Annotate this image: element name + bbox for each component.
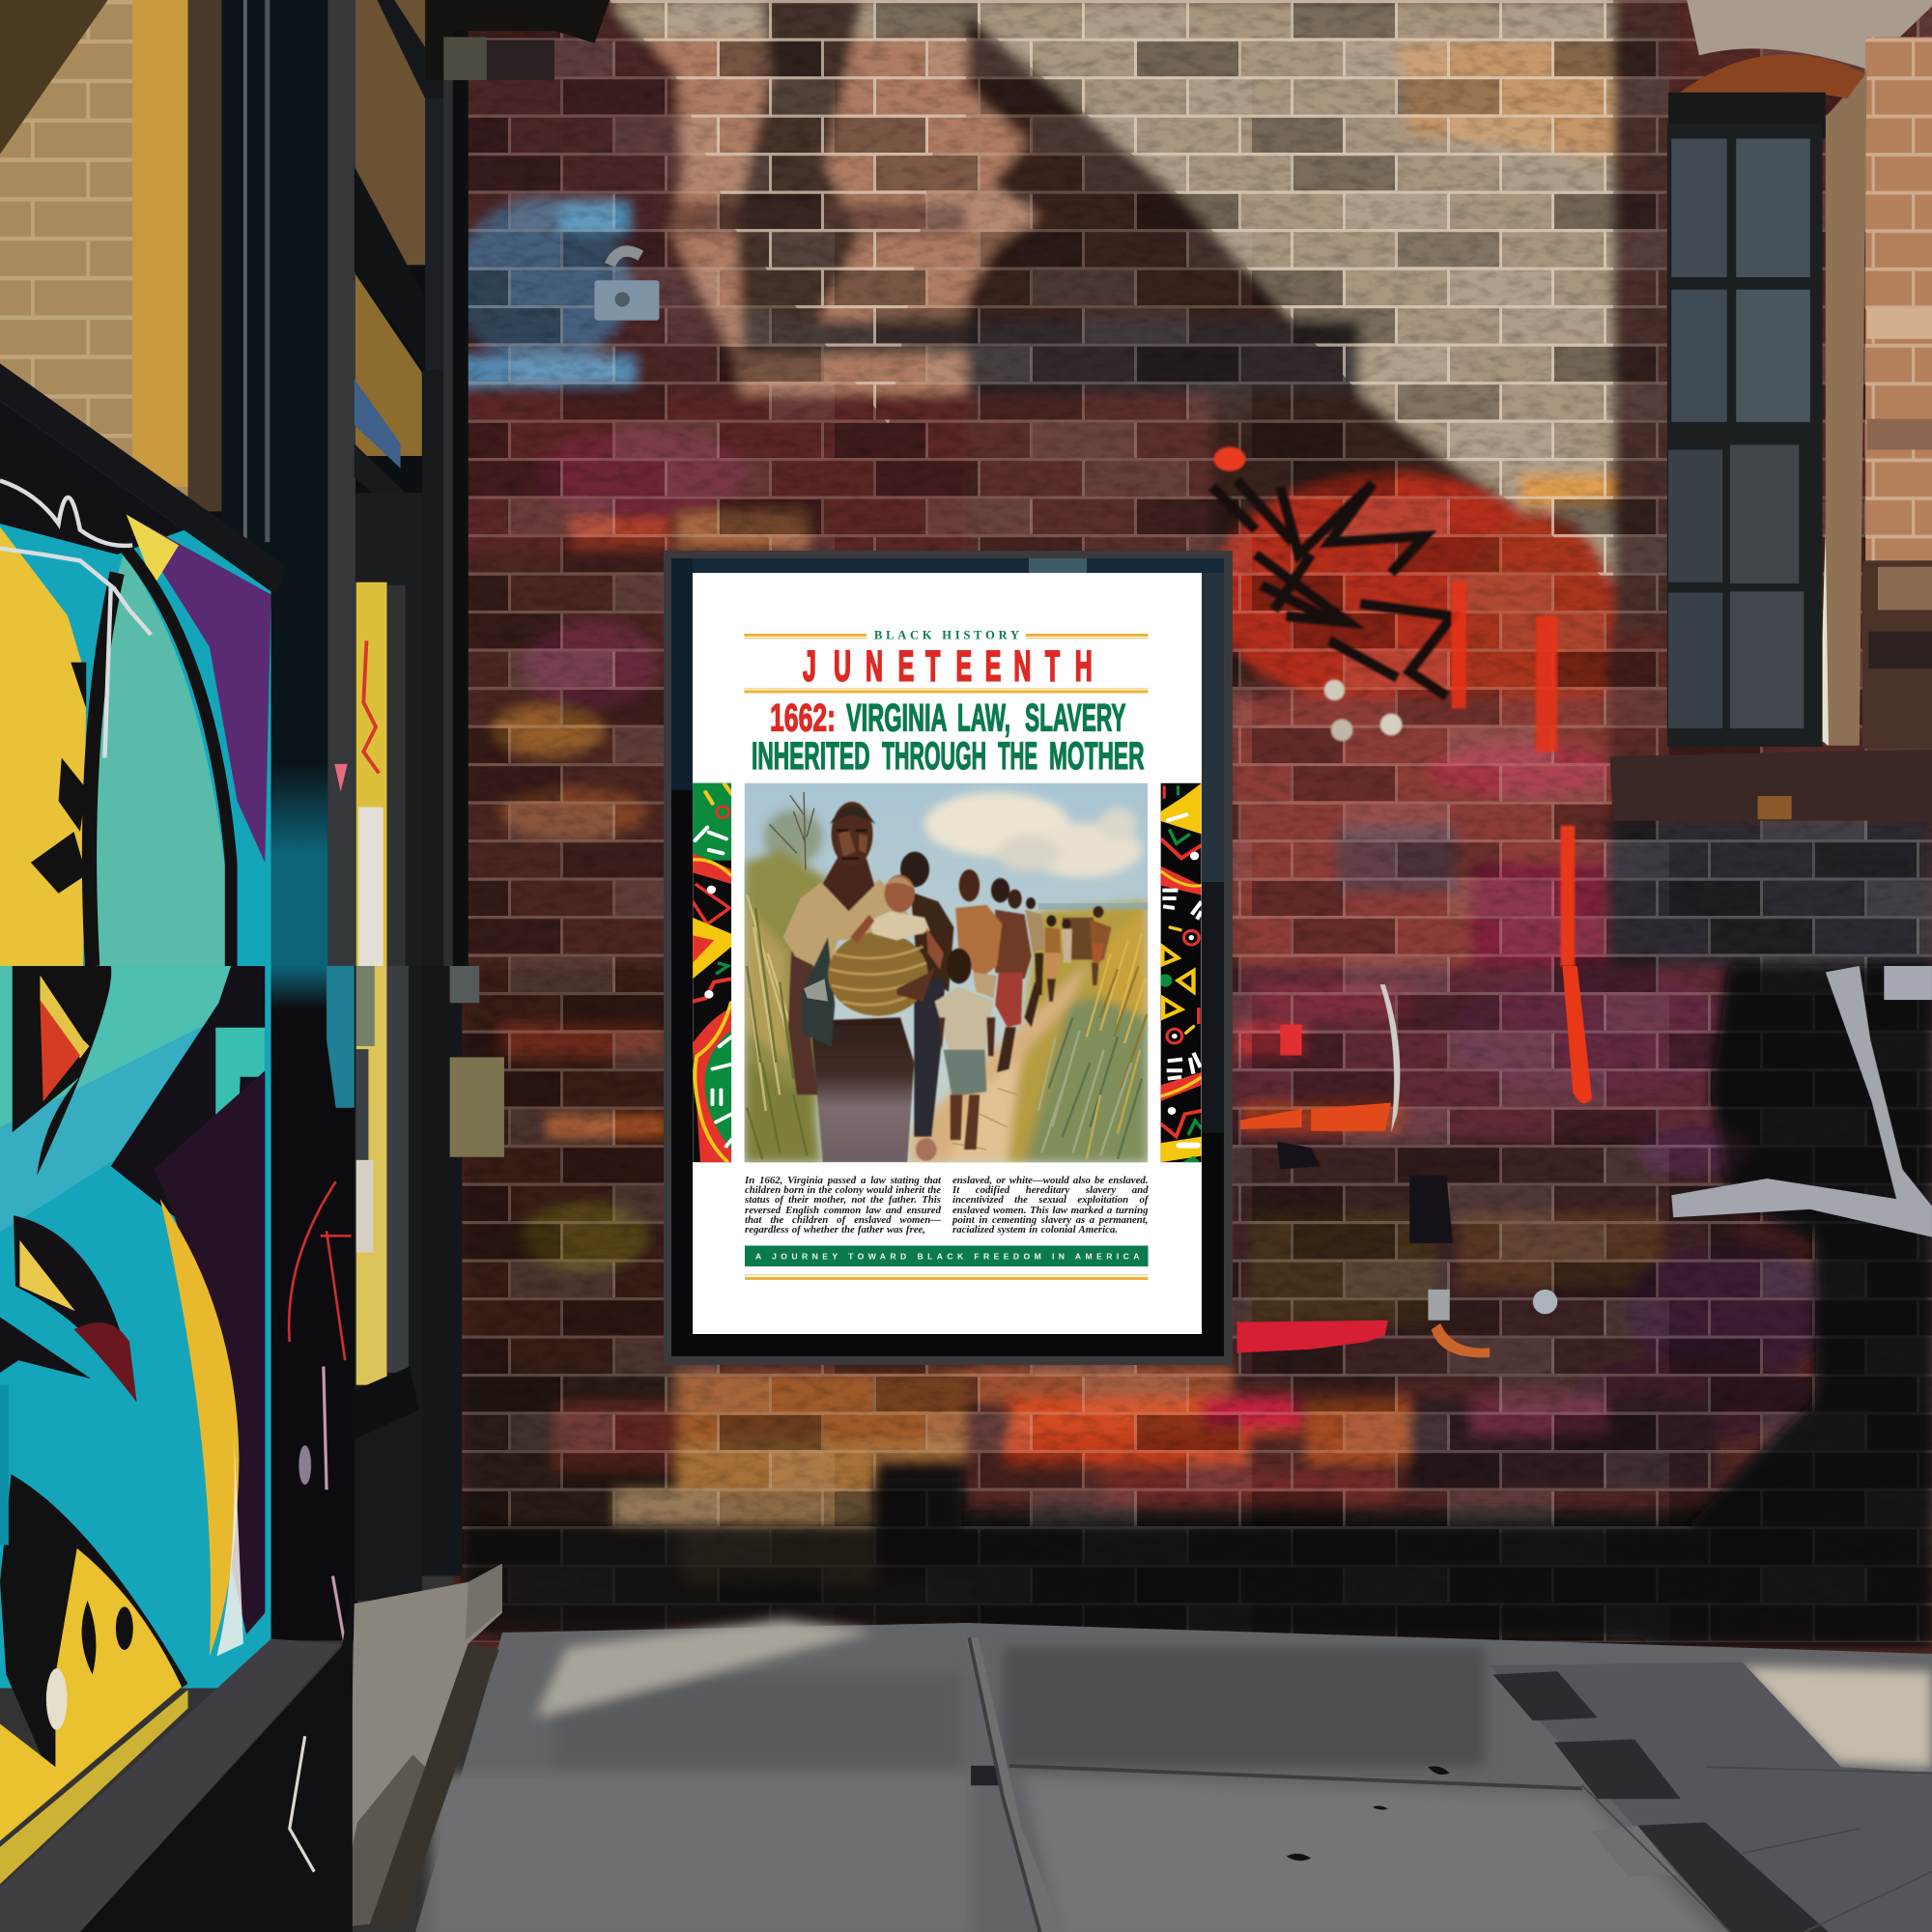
headline: LAW, [957,697,1010,740]
title: Juneteenth: JUNETEENTH [803,641,1093,690]
call-to-action banner [745,1246,1148,1266]
left decorative strip: African-inspired pattern [693,783,731,1162]
headline: THROUGH [882,735,986,778]
curb and step [0,1564,502,1932]
body text column 2: It codified hereditary slavery and [952,1184,1148,1196]
crowd in the distance [1063,918,1094,959]
body text column 1: that the children of enslaved women— [745,1214,941,1226]
mural black shapes and yellow arcs [0,966,265,1884]
sidewalk tiles, seams and debris [966,1637,1932,1932]
woman in ochre shirt [959,869,980,901]
body text column 2: incentivized the sexual exploitation of [952,1194,1148,1206]
poster header rules [744,634,1148,694]
brick courses and mortar [454,0,1932,1662]
woman in red skirt [995,910,1032,979]
body text column 1: In 1662, Virginia passed a law stating that [745,1175,941,1186]
body text column 1: status of their mother, not the father. This [745,1194,941,1206]
body text column 2 [952,1175,1150,1236]
poster frame [664,551,1233,1365]
kicker: Black History: BLACK HISTORY [874,628,1019,641]
headline: THE [998,735,1037,778]
mural on left wall panel [0,363,287,1689]
call-to-action banner: A JOURNEY TOWARD BLACK FREEDOM IN AMERICA [755,1252,1140,1262]
headline [752,697,1144,778]
graffiti: lower drips and white strokes [1237,966,1932,1357]
darkened lower wall and black graffiti mass [464,966,1932,1644]
poster painting: mother and children walking a path [745,783,1149,1162]
headline: SLAVERY [1025,697,1126,740]
mother figure [810,1017,914,1162]
mural roof cap [0,363,287,594]
graffiti: red tag and drips [1212,446,1575,966]
headline: 1662: [770,697,836,740]
body text column 1 [744,1175,941,1236]
grass strokes [747,895,1147,1159]
body text column 1: children born in the colony would inherit the [745,1184,941,1196]
background: brick wall [453,0,1932,1662]
electrical box on wall [594,251,659,321]
body text column 1: reversed English common law and ensured [745,1205,941,1216]
headline: MOTHER [1049,735,1144,778]
body text column 2: point in cementing slavery as a permanent, [952,1214,1148,1226]
body text column 2: enslaved women. This law marked a turning [952,1205,1148,1216]
tree [769,792,814,869]
wall colour patches: sunlight, shadow and graffiti [453,0,1932,1647]
sidewalk [415,1619,1932,1932]
dark ledge beneath mural [0,1638,342,1932]
body text column 2: racialized system in colonial America. [952,1224,1118,1236]
left building: windows, frames and door [0,0,610,966]
baby [869,911,929,940]
headline: VIRGINIA [846,697,947,740]
poster paper [693,573,1202,1334]
body text column 2: enslaved, or white—would also be enslaved. [952,1175,1148,1186]
man behind the mother [900,852,929,887]
right decorative strip: African-inspired pattern [1158,783,1202,1162]
basket [828,932,928,1016]
body text column 1: regardless of whether the father was free, [745,1224,925,1236]
child in front [947,949,972,983]
right window with arch, panes and sill [1610,0,1932,821]
top canopy and stone corner [425,0,610,80]
bottom rule [745,1274,1148,1280]
headline: INHERITED [752,735,869,778]
